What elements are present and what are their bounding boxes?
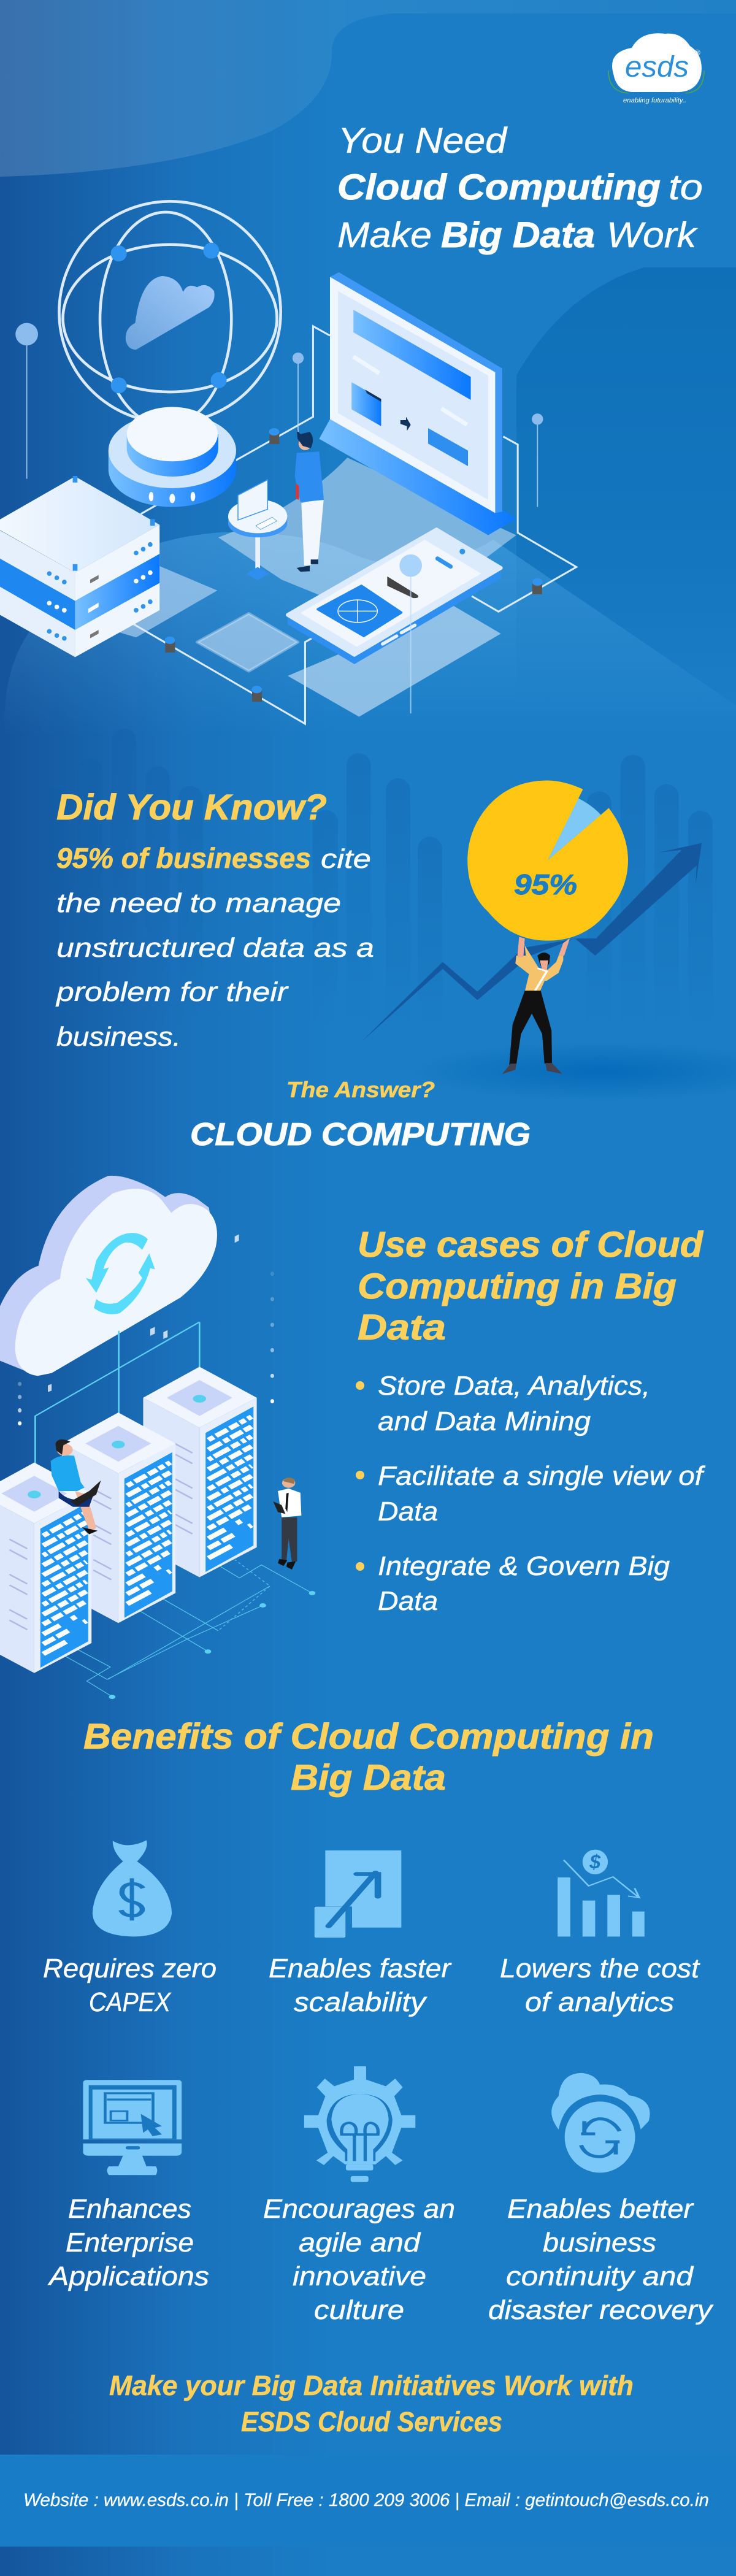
use cases heading (358, 1225, 704, 1347)
benefit 4-6 labels: Enhances (68, 2194, 191, 2224)
title: to (669, 167, 703, 207)
benefit 4-6 labels: innovative (293, 2261, 426, 2291)
logo: esds (608, 33, 704, 104)
footer contact band: Website : www.esds.co.in | Toll Free : 1800 209 3006 | Email : getintouch@esds.co.in (23, 2490, 709, 2510)
logo: esds: enabling futurability.. (623, 97, 686, 104)
standing man (273, 1478, 301, 1570)
icon: money bag (93, 1840, 172, 1936)
pie chart 95% (467, 780, 628, 941)
benefit 4-6 labels: culture (314, 2295, 404, 2325)
call to action: ESDS Cloud Services (241, 2406, 502, 2437)
benefit 4-6 labels: continuity and (506, 2261, 694, 2291)
title: Big Data (441, 215, 595, 255)
sphere pedestal (109, 407, 236, 507)
use cases heading: Data (358, 1308, 446, 1347)
icon: cloud sync (551, 2073, 650, 2172)
benefit 4-6 labels: Enterprise (66, 2228, 194, 2258)
the answer (190, 1077, 531, 1152)
did you know text: problem for their (55, 977, 289, 1007)
did you know text: business. (56, 1022, 181, 1052)
illustration: cloud data center hero (0, 201, 577, 724)
did you know text: 95% of businesses (56, 842, 311, 874)
icon: lower cost chart (558, 1850, 645, 1936)
benefit 4-6 labels: Encourages an (263, 2194, 455, 2224)
did you know text (55, 788, 374, 1052)
benefit 4-6 labels: disaster recovery (488, 2295, 714, 2325)
did you know text: the need to manage (56, 888, 341, 918)
icon: lower cost chart: $ (589, 1851, 601, 1873)
benefits heading: Benefits of Cloud Computing in (83, 1717, 654, 1757)
background bar chart (45, 729, 713, 1031)
data dots (18, 1235, 274, 1425)
floor circuit (66, 1560, 312, 1697)
benefit 1-3 labels: Requires zero (43, 1953, 217, 1984)
floor panels (108, 458, 516, 717)
pie chart 95%: 95% (514, 868, 577, 900)
illustration: cloud and server towers (0, 1176, 315, 1699)
benefit 1-3 labels (43, 1953, 700, 2017)
logo: esds: esds (625, 51, 689, 83)
woman with laptop (51, 1439, 101, 1535)
pins (15, 323, 543, 713)
use cases list: and Data Mining (378, 1406, 591, 1436)
benefit 4-6 labels: Enables better (507, 2194, 695, 2224)
person with desk (228, 429, 324, 580)
sphere with cloud (59, 201, 281, 426)
benefit 1-3 labels: Lowers the cost (500, 1953, 700, 1984)
did you know text: cite (321, 844, 371, 874)
use cases list: Data (378, 1586, 438, 1616)
connection lines (35, 1322, 199, 1495)
server tower front (0, 1462, 91, 1673)
use cases list: Data (378, 1497, 438, 1527)
trend arrow (361, 843, 702, 1041)
benefit 4-6 labels: agile and (299, 2228, 421, 2258)
use cases heading: Computing in Big (358, 1267, 677, 1306)
benefit 4-6 labels (47, 2194, 714, 2325)
use cases heading: Use cases of Cloud (358, 1225, 704, 1265)
title: Make (337, 215, 432, 255)
benefits heading (83, 1717, 654, 1798)
footer contact band (0, 2455, 736, 2547)
title: Cloud Computing (337, 167, 661, 207)
title: You Need (338, 121, 508, 161)
benefit 1-3 labels: Enables faster (269, 1953, 452, 1984)
ground shadow (411, 1042, 736, 1101)
icon: scalability (315, 1850, 401, 1938)
icon: gear bulb (304, 2066, 415, 2182)
phone (288, 529, 501, 664)
connector nodes (165, 428, 543, 702)
did you know text: Did You Know? (56, 788, 327, 827)
server tower back (143, 1367, 257, 1577)
benefits heading: Big Data (291, 1758, 446, 1798)
monitor (319, 272, 516, 535)
use cases list: Integrate & Govern Big (378, 1551, 670, 1581)
woman lifting chart (502, 937, 570, 1074)
the answer: CLOUD COMPUTING (190, 1117, 531, 1152)
did you know text: unstructured data as a (56, 933, 374, 963)
server rack (0, 476, 159, 657)
use cases list: Store Data, Analytics, (378, 1371, 650, 1401)
cloud (0, 1176, 217, 1376)
icon: monitor (83, 2080, 182, 2175)
benefit 4-6 labels: Applications (47, 2261, 209, 2291)
benefit 1-3 labels: scalability (294, 1987, 427, 2017)
server tower middle (62, 1413, 175, 1623)
logo: esds: ® (694, 48, 700, 57)
title: Work (607, 215, 698, 255)
call to action (109, 2370, 634, 2437)
use cases list: Facilitate a single view of (378, 1461, 706, 1491)
the answer: The Answer? (286, 1077, 435, 1102)
benefit 4-6 labels: business (543, 2228, 656, 2258)
use cases list (356, 1371, 706, 1616)
benefit 1-3 labels: of analytics (525, 1987, 674, 2017)
circuit lines (134, 326, 577, 724)
title (337, 121, 703, 255)
benefit 1-3 labels: CAPEX (89, 1987, 171, 2017)
call to action: Make your Big Data Initiatives Work with (109, 2370, 634, 2401)
